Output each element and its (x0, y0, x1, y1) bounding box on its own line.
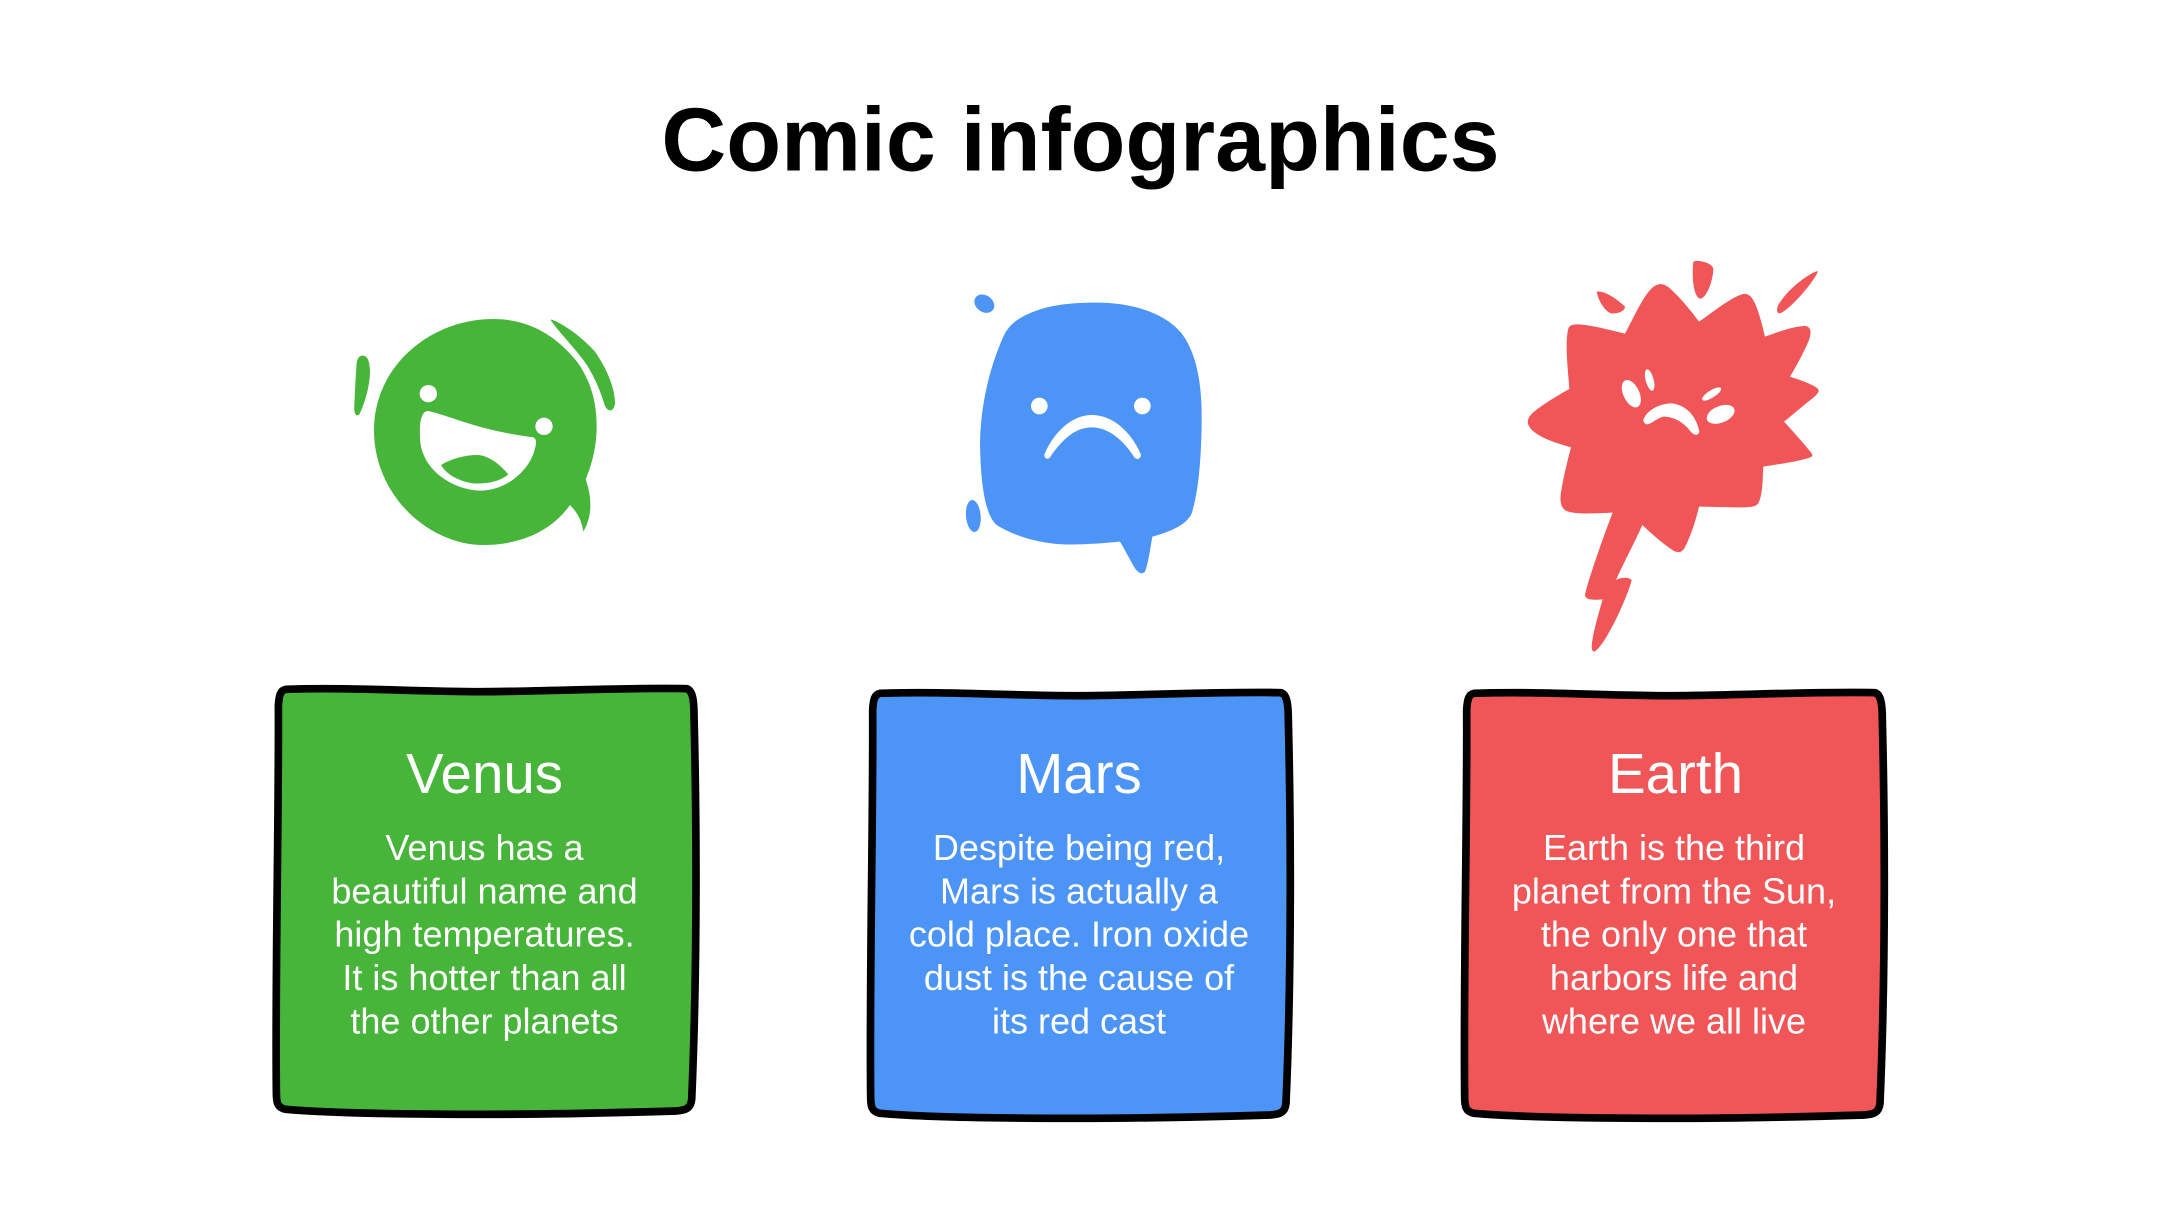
text block: Venus description: beautiful name and (331, 870, 638, 911)
text block: Venus description: high temperatures. (334, 914, 635, 955)
text block: Venus description: the other planets (350, 1000, 619, 1041)
text block: Venus description: It is hotter than all (342, 957, 627, 998)
title: Comic infographics (661, 90, 1500, 190)
text block: Earth description: where we all live (1541, 1000, 1806, 1041)
text block: Earth description: the only one that (1541, 914, 1807, 955)
panel box: Mars (870, 692, 1290, 1118)
text block: Mars description: dust is the cause of (924, 957, 1235, 998)
icon: blue sad speech bubble (965, 291, 1202, 573)
text block: Venus description (331, 827, 638, 1041)
icon: red angry burst with lightning tail (1528, 261, 1819, 652)
text block: Earth description: planet from the Sun, (1512, 870, 1836, 911)
text block: Earth description: Earth is the third (1543, 827, 1805, 868)
text block: Mars description: its red cast (992, 1000, 1166, 1041)
text block: Venus description: Venus has a (385, 827, 585, 868)
text block: Mars description (909, 827, 1249, 1041)
panel: Mars (870, 692, 1290, 1118)
text block: Earth description: harbors life and (1550, 957, 1798, 998)
text block: Mars description: Mars is actually a (940, 870, 1219, 911)
heading: Mars: Mars (1016, 742, 1142, 805)
panel box: Earth (1464, 692, 1884, 1118)
panel: Venus (276, 688, 696, 1114)
heading: Earth: Earth (1608, 742, 1743, 805)
text block: Earth description (1512, 827, 1836, 1041)
text block: Mars description: Despite being red, (933, 827, 1225, 868)
panel box: Venus (276, 688, 696, 1114)
text block: Mars description: cold place. Iron oxide (909, 914, 1249, 955)
heading: Venus: Venus (406, 742, 563, 805)
panel: Earth (1464, 692, 1884, 1118)
icon: green laughing speech bubble (354, 319, 615, 545)
